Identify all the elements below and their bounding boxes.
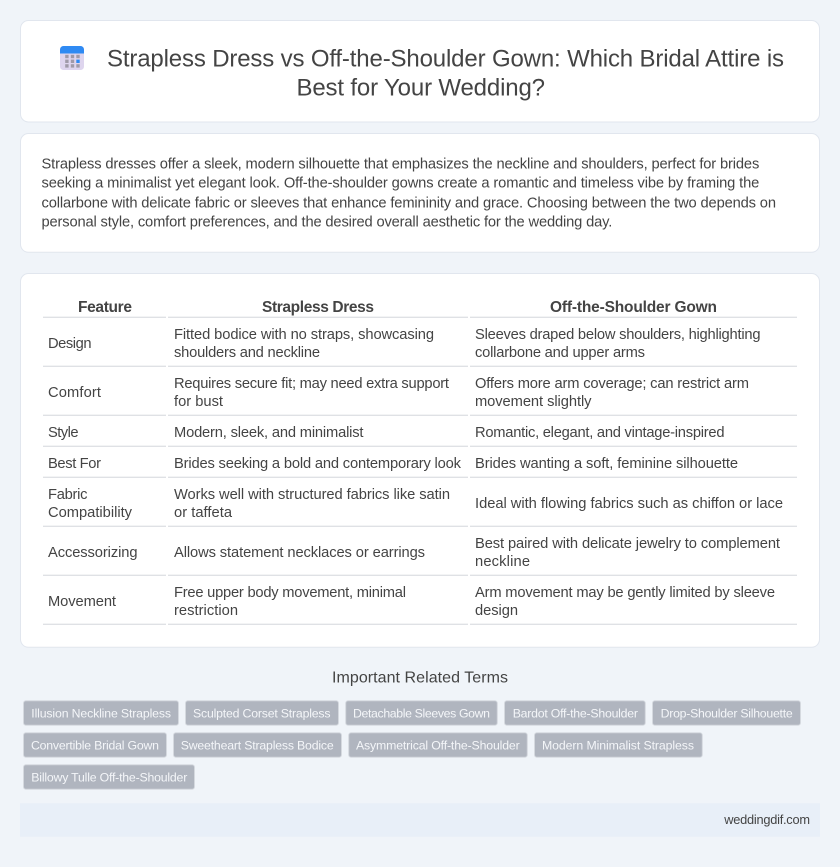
tag: modern minimalist strapless — [534, 733, 702, 757]
intro paragraph: personal style, comfort preferences, and the desired overall aesthetic for the wedding day. — [42, 215, 612, 231]
icon: calendar — [60, 46, 84, 70]
table header: Off-the-Shoulder Gown — [550, 299, 717, 316]
row: accessorizing: Accessorizing — [48, 545, 138, 561]
row: style: Style — [48, 425, 78, 441]
panel: related term tags — [24, 701, 800, 789]
tag: sweetheart strapless bodice — [174, 733, 342, 757]
panel: introduction — [20, 134, 820, 252]
row: movement — [48, 585, 775, 619]
tag: sculpted corset strapless — [186, 701, 338, 725]
row: design: Design — [48, 336, 92, 352]
row: comfort: Comfort — [48, 385, 101, 401]
tag: illusion neckline strapless — [24, 701, 178, 725]
tag: billowy tulle off-the-shoulder: Billowy Tulle Off-the-Shoulder — [31, 770, 187, 784]
footer: weddingdif.com — [723, 812, 810, 827]
tag: convertible bridal gown — [24, 733, 166, 757]
intro paragraph: seeking a minimalist yet elegant look. Off-the-shoulder gowns create a romantic and timeless vibe by framing the — [42, 176, 759, 192]
row: accessorizing: Best paired with delicate jewelry to complement — [475, 536, 780, 552]
table header: Feature — [78, 299, 132, 316]
row: accessorizing: neckline — [475, 554, 530, 570]
row: best for — [48, 456, 738, 472]
tag: detachable sleeves gown — [346, 701, 497, 725]
footer — [20, 803, 820, 837]
tag: drop-shoulder silhouette — [652, 701, 800, 725]
tag: billowy tulle off-the-shoulder — [24, 765, 194, 789]
row: fabric compatibility: Fabric — [48, 487, 88, 503]
row: movement: Free upper body movement, minimal — [174, 585, 406, 601]
row: style — [48, 425, 724, 441]
row: movement: restriction — [174, 603, 238, 619]
row: fabric compatibility: Ideal with flowing fabrics such as chiffon or lace — [475, 496, 783, 512]
tag: drop-shoulder silhouette: Drop-Shoulder Silhouette — [661, 706, 793, 720]
row: comfort: Requires secure fit; may need extra support — [174, 376, 449, 392]
row: movement: design — [475, 603, 518, 619]
row: best for: Brides wanting a soft, feminine silhouette — [475, 456, 738, 472]
table header — [78, 299, 717, 316]
tag: detachable sleeves gown: Detachable Sleeves Gown — [353, 706, 490, 720]
row: movement: Movement — [48, 594, 116, 610]
row: style: Romantic, elegant, and vintage-inspired — [475, 425, 724, 441]
title: Best for Your Wedding? — [296, 75, 545, 102]
intro paragraph: Strapless dresses offer a sleek, modern silhouette that emphasizes the neckline and shoulders, perfect for brides — [42, 156, 759, 172]
tag: modern minimalist strapless: Modern Minimalist Strapless — [542, 738, 694, 752]
intro paragraph — [42, 156, 776, 231]
row: design: Sleeves draped below shoulders, highlighting — [475, 327, 760, 343]
row: design: Fitted bodice with no straps, showcasing — [174, 327, 434, 343]
row: style: Modern, sleek, and minimalist — [174, 425, 364, 441]
row: fabric compatibility: or taffeta — [174, 505, 233, 521]
intro paragraph: collarbone with delicate fabric or sleeves that enhance femininity and grace. Choosing between the two depends on — [42, 195, 776, 211]
row: design: collarbone and upper arms — [475, 345, 645, 361]
tag: sculpted corset strapless: Sculpted Corset Strapless — [193, 706, 330, 720]
row: movement: Arm movement may be gently limited by sleeve — [475, 585, 775, 601]
row: comfort: Offers more arm coverage; can restrict arm — [475, 376, 749, 392]
panel: header — [20, 20, 820, 122]
row: accessorizing — [48, 536, 780, 570]
row: fabric compatibility — [48, 487, 783, 521]
row: comfort: for bust — [174, 394, 223, 410]
row: best for: Best For — [48, 456, 101, 472]
table header: Strapless Dress — [262, 299, 374, 316]
tag: sweetheart strapless bodice: Sweetheart Strapless Bodice — [181, 738, 334, 752]
row: accessorizing: Allows statement necklaces or earrings — [174, 545, 425, 561]
tag: asymmetrical off-the-shoulder: Asymmetrical Off-the-Shoulder — [356, 738, 520, 752]
heading: important related terms: Important Related Terms — [332, 670, 508, 687]
tag: bardot off-the-shoulder — [504, 701, 645, 725]
tag: illusion neckline strapless: Illusion Neckline Strapless — [31, 706, 171, 720]
tag: convertible bridal gown: Convertible Bridal Gown — [31, 738, 159, 752]
row: design: shoulders and neckline — [174, 345, 320, 361]
row: best for: Brides seeking a bold and contemporary look — [174, 456, 462, 472]
tag: asymmetrical off-the-shoulder — [349, 733, 527, 757]
title — [107, 46, 784, 102]
row: fabric compatibility: Works well with structured fabrics like satin — [174, 487, 450, 503]
panel: comparison table — [20, 274, 820, 647]
tag: bardot off-the-shoulder: Bardot Off-the-Shoulder — [513, 706, 638, 720]
row: design — [48, 327, 760, 361]
row: comfort: movement slightly — [475, 394, 592, 410]
title: Strapless Dress vs Off-the-Shoulder Gown: Which Bridal Attire is — [107, 46, 784, 73]
row: comfort — [48, 376, 749, 410]
row: fabric compatibility: Compatibility — [48, 505, 133, 521]
